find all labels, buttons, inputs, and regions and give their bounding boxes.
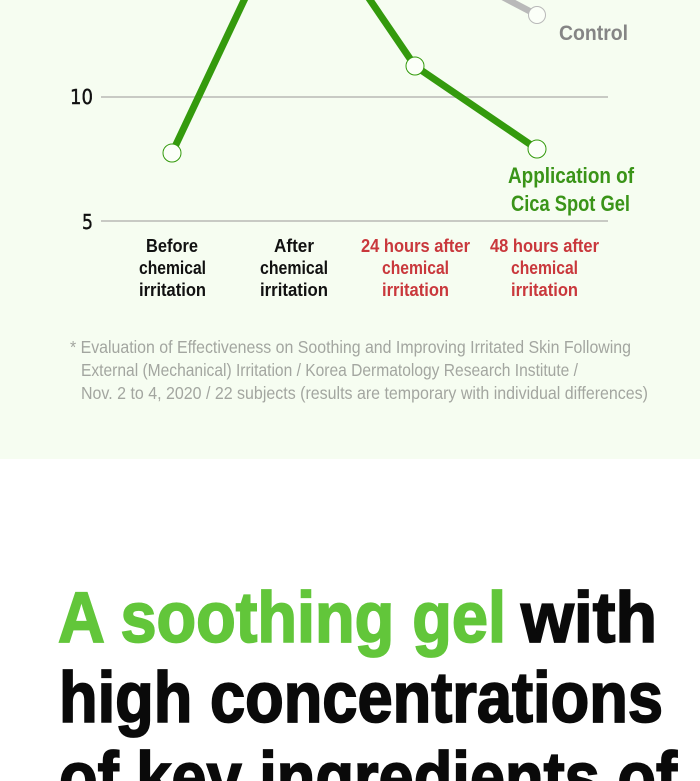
footnote: External (Mechanical) Irritation / Korea Dermatology Research Institute / [81, 360, 578, 380]
x-axis label: before [139, 235, 206, 300]
heading: with [520, 579, 657, 658]
line chart [70, 0, 635, 300]
x-axis label: before: irritation [139, 279, 206, 300]
series label: Application of Cica Spot Gel: Cica Spot Gel [511, 191, 630, 216]
x-axis label: after: After [274, 235, 314, 256]
x-axis label: 48 hours: 48 hours after [490, 235, 599, 256]
footnote [70, 337, 648, 403]
x-axis label: 24 hours: chemical [382, 257, 449, 278]
y-axis label: 10: 10 [70, 85, 93, 109]
x-axis label: after: irritation [260, 279, 328, 300]
panel: chart background [0, 0, 700, 459]
data point: 48 hours [528, 140, 546, 158]
x-axis label: after [260, 235, 328, 300]
x-axis label: before: chemical [139, 257, 206, 278]
x-axis label: 48 hours: irritation [511, 279, 578, 300]
heading: A soothing gel [58, 579, 506, 658]
Cica Spot Gel line, rising segment [172, 0, 247, 153]
series label: Application of Cica Spot Gel [508, 163, 635, 216]
y-axis label: 5: 5 [82, 210, 93, 234]
data point: before irritation [163, 144, 181, 162]
control line [497, 0, 537, 15]
heading [58, 579, 677, 781]
x-axis label: 48 hours [490, 235, 599, 300]
x-axis label: after: chemical [260, 257, 328, 278]
x-axis label: 24 hours [361, 235, 470, 300]
series label: Control: Control [559, 22, 628, 45]
series label: Application of Cica Spot Gel: Application of [508, 163, 635, 188]
data point: control, 48 hours [528, 6, 546, 24]
x-axis label: 48 hours: chemical [511, 257, 578, 278]
x-axis label: before: Before [146, 235, 198, 256]
footnote: * Evaluation of Effectiveness on Soothing and Improving Irritated Skin Following [70, 337, 631, 357]
footnote: Nov. 2 to 4, 2020 / 22 subjects (results are temporary with individual differences) [81, 383, 648, 403]
x-axis label: 24 hours: 24 hours after [361, 235, 470, 256]
Cica Spot Gel line, falling segment [366, 0, 537, 149]
x-axis label: 24 hours: irritation [382, 279, 449, 300]
data point: 24 hours [406, 57, 424, 75]
